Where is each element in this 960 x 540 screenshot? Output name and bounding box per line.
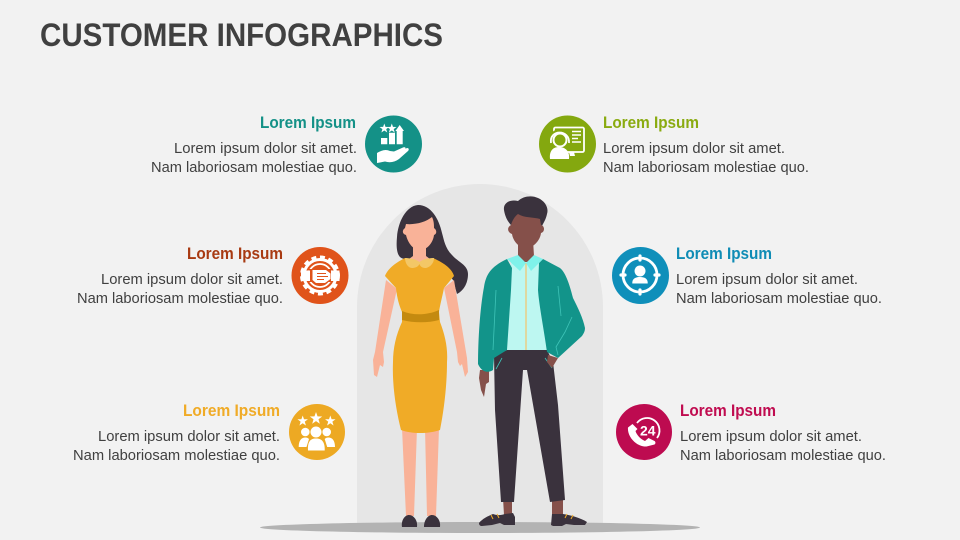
item: top left (151, 114, 422, 176)
heading: Lorem Ipsum (680, 402, 776, 420)
body text: Nam laboriosam molestiae quo. (151, 159, 357, 176)
icon: growth chart on hand (365, 116, 422, 172)
neck (405, 244, 434, 270)
item: middle left (77, 245, 348, 307)
item: bottom left (73, 402, 345, 464)
figure: man (478, 196, 587, 526)
heading: Lorem Ipsum (603, 114, 699, 132)
left arm (373, 280, 397, 377)
shirt (507, 262, 548, 352)
title: CUSTOMER INFOGRAPHICS (40, 17, 443, 53)
legs (402, 428, 439, 516)
shoes (402, 515, 440, 527)
jacket (478, 259, 585, 372)
body text: Nam laboriosam molestiae quo. (77, 290, 283, 307)
icon: customers with stars (289, 404, 345, 460)
icon: gear with handshake (292, 247, 348, 304)
body text: Lorem ipsum dolor sit amet. (174, 140, 357, 157)
body text: Lorem ipsum dolor sit amet. (101, 271, 283, 288)
left hand (479, 370, 489, 397)
zipper (525, 263, 527, 352)
icon: 24 hour phone support: 24 (640, 422, 656, 438)
neck (518, 240, 534, 266)
item: middle right (612, 245, 882, 307)
heading: Lorem Ipsum (676, 245, 772, 263)
body text: Nam laboriosam molestiae quo. (73, 447, 280, 464)
face (403, 217, 436, 250)
shoe laces (491, 514, 573, 519)
hair (504, 196, 548, 226)
body text: Nam laboriosam molestiae quo. (603, 159, 809, 176)
figure: woman (373, 205, 468, 527)
item: top right (539, 114, 809, 176)
shoes (479, 513, 587, 526)
icon: 24 hour phone support (616, 404, 672, 460)
hand in pocket (547, 355, 558, 368)
face (508, 214, 544, 248)
heading: Lorem Ipsum (187, 245, 283, 263)
jacket highlights (493, 286, 572, 355)
hair (397, 205, 468, 294)
item: bottom right (616, 402, 886, 464)
body text: Nam laboriosam molestiae quo. (676, 290, 882, 307)
body text: Nam laboriosam molestiae quo. (680, 447, 886, 464)
ankles (503, 498, 563, 515)
pants (494, 350, 565, 502)
pocket trims (496, 358, 552, 369)
belt (402, 310, 439, 322)
dress (385, 258, 454, 433)
body text: Lorem ipsum dolor sit amet. (680, 428, 862, 445)
heading: Lorem Ipsum (183, 402, 280, 420)
right arm (444, 280, 468, 377)
heading: Lorem Ipsum (260, 114, 356, 132)
arch backdrop (357, 184, 603, 524)
icon: support agent at monitor (539, 116, 596, 172)
ground shadow (260, 522, 700, 533)
collar (507, 255, 543, 271)
body text: Lorem ipsum dolor sit amet. (676, 271, 858, 288)
icon: customer target (612, 247, 669, 304)
body text: Lorem ipsum dolor sit amet. (98, 428, 280, 445)
body text: Lorem ipsum dolor sit amet. (603, 140, 785, 157)
collar (405, 258, 434, 268)
